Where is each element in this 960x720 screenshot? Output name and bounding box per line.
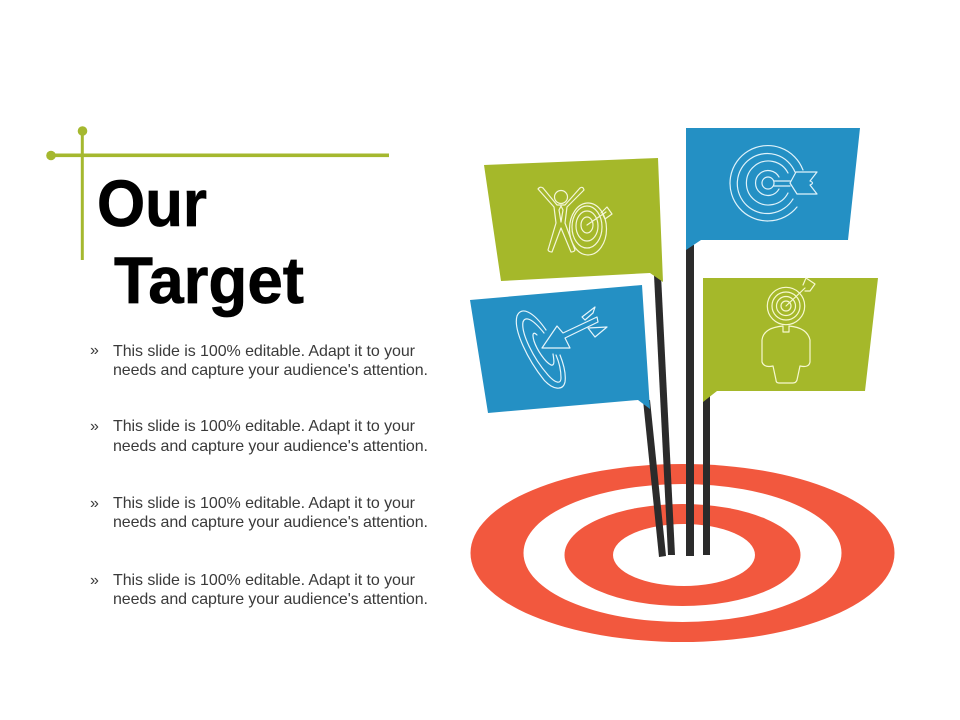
bullet 3: needs and capture your audience's attention. xyxy=(113,514,428,531)
bullet 4 xyxy=(90,572,428,608)
bullet 2: This slide is 100% editable. Adapt it to your xyxy=(113,418,416,435)
accent lines and dots xyxy=(46,126,389,260)
bullet 4: This slide is 100% editable. Adapt it to your xyxy=(113,572,416,589)
title: Our Target xyxy=(97,166,304,317)
bullet 3 xyxy=(90,495,428,531)
bullet 2: » xyxy=(90,418,99,435)
bullet 3: This slide is 100% editable. Adapt it to your xyxy=(113,495,416,512)
flag: blue, arrow in target icon xyxy=(470,285,650,413)
flag: green, achiever icon xyxy=(484,158,663,282)
bullet 1: needs and capture your audience's attention. xyxy=(113,362,428,379)
icon: person with target for head xyxy=(762,278,815,383)
flag poles xyxy=(643,245,710,557)
bullet 4: needs and capture your audience's attention. xyxy=(113,591,428,608)
bullet 1 xyxy=(90,342,428,379)
target rings xyxy=(470,464,894,642)
icon: person celebrating beside target xyxy=(538,187,612,255)
title: Our Target: Our xyxy=(97,166,207,240)
icon: concentric target with arrow xyxy=(730,146,817,221)
bullet 2 xyxy=(90,418,428,455)
bullet 2: needs and capture your audience's attention. xyxy=(113,438,428,455)
title block with crosshair accent xyxy=(46,126,389,317)
icon: arrow hitting tilted target xyxy=(516,307,607,388)
bullet list xyxy=(90,342,428,608)
flag: green, target-minded person icon xyxy=(703,278,878,402)
bullet 3: » xyxy=(90,495,99,512)
bullet 1: » xyxy=(90,342,99,359)
flag: blue, target with arrow icon xyxy=(686,128,860,250)
bullet 1: This slide is 100% editable. Adapt it to your xyxy=(113,343,416,360)
title: Our Target: Target xyxy=(114,243,304,317)
bullet 4: » xyxy=(90,572,99,589)
